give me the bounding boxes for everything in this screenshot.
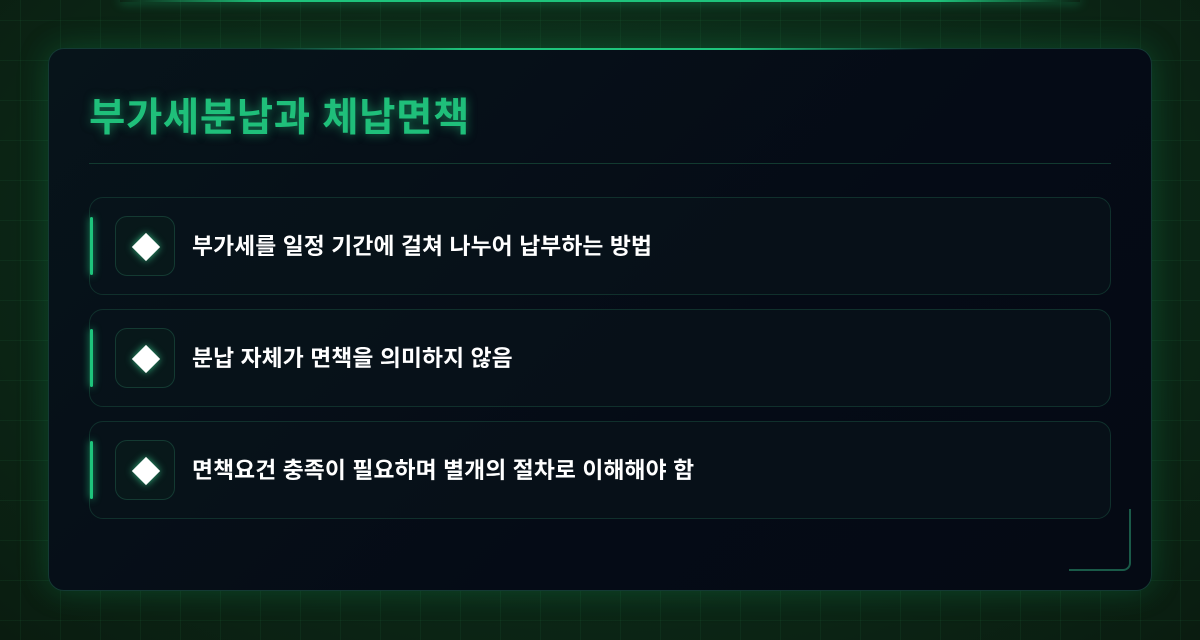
text 2: 분납 자체가 면책을 의미하지 않음: [192, 345, 513, 371]
item 1: [89, 197, 1111, 295]
item 2: [89, 309, 1111, 407]
title: 부가세분납과 체납면책: [89, 96, 470, 140]
icon: diamond: [115, 440, 175, 500]
icon: diamond: [115, 216, 175, 276]
icon: diamond: [115, 328, 175, 388]
panel: main card: [48, 48, 1152, 591]
item 3: [89, 421, 1111, 519]
text 3: 면책요건 충족이 필요하며 별개의 절차로 이해해야 함: [192, 457, 694, 483]
text 1: 부가세를 일정 기간에 걸쳐 나누어 납부하는 방법: [192, 233, 652, 259]
